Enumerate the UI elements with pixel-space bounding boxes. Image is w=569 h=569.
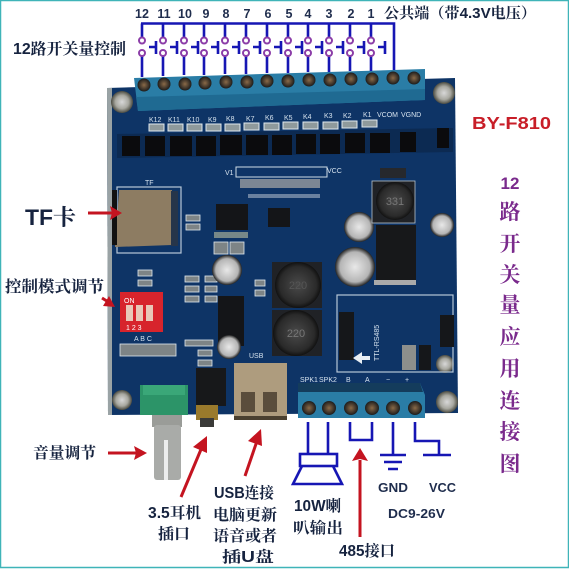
channel silkscreen labels: K7 (246, 116, 255, 123)
vertical title: 12 (501, 174, 519, 193)
channel numbers: 5 (286, 7, 293, 21)
channel silkscreen labels: K6 (265, 115, 274, 122)
earphone label (148, 503, 201, 543)
TF label: TF卡 (25, 205, 76, 230)
top terminal block (134, 69, 425, 111)
485 label: 485接口 (339, 541, 395, 560)
earphone label: 3.5耳机 (148, 503, 201, 522)
speaker label: 10W喇 (294, 497, 341, 515)
TTL-RS485 module outline: TTL-RS485 (374, 325, 381, 361)
channel silkscreen labels: K5 (284, 115, 293, 122)
electrolytic capacitors (212, 212, 454, 359)
pin header V1 VCC: V1 (225, 170, 234, 177)
power inductors: 331 (386, 196, 404, 208)
channel numbers: 6 (265, 7, 272, 21)
vertical title: 应 (500, 325, 520, 349)
terminal screws (138, 72, 420, 92)
channel silkscreen labels: K4 (303, 114, 312, 121)
speaker label (293, 497, 343, 537)
headphone jack (196, 368, 226, 427)
DIP switch (120, 292, 163, 343)
channel numbers: 12 (135, 7, 149, 21)
small passive components (120, 215, 265, 366)
volume label: 音量调节 (33, 443, 96, 462)
USB label: 电脑更新 (213, 506, 278, 524)
terminal screws (302, 401, 422, 415)
wiring: VCC (415, 422, 451, 455)
voltage label: DC9-26V (388, 507, 446, 521)
vertical title: 路 (500, 200, 520, 224)
common terminal label: 公共端（带4.3V电压） (384, 4, 536, 22)
DIP switch: ON (124, 298, 134, 305)
wiring: speaker symbol (293, 422, 342, 484)
TF arrow (88, 206, 122, 220)
pin header V1 VCC: VCC (327, 168, 342, 175)
bottom terminal labels: SPK1 (300, 377, 318, 384)
vertical title: 开 (500, 232, 520, 256)
channel numbers: 4 (305, 7, 312, 21)
earphone arrow (181, 436, 207, 497)
vertical title: 接 (500, 420, 522, 444)
circuit board (107, 78, 458, 427)
potentiometer (140, 385, 188, 480)
wiring: ground symbol (380, 422, 406, 469)
mode label: 控制模式调节 (5, 277, 104, 296)
switch control label: 12路开关量控制 (13, 39, 126, 58)
USB label: USB连接 (214, 483, 274, 502)
TF card slot (112, 180, 181, 253)
DIP switch: 1 2 3 (126, 325, 142, 332)
earphone label: 插口 (158, 524, 190, 543)
channel silkscreen labels: K8 (226, 116, 235, 123)
power inductors: 220 (289, 280, 307, 292)
485 arrow (352, 448, 368, 537)
vertical title: 量 (500, 293, 520, 317)
wiring: common bus and 12 switches (139, 24, 394, 77)
wiring: 485 terminal (350, 422, 372, 440)
bottom terminal labels: SPK2 (319, 377, 337, 384)
bottom terminal block (298, 383, 425, 418)
channel silkscreen labels: K2 (343, 113, 352, 120)
bottom terminal labels (300, 377, 409, 384)
vertical title: 关 (500, 263, 520, 287)
VCC label: VCC (429, 481, 456, 495)
channel silkscreen labels (149, 112, 421, 124)
vertical title: 图 (500, 452, 520, 476)
channel numbers: 1 (368, 7, 375, 21)
bottom terminal labels: B (346, 377, 351, 384)
TTL-RS485 module outline (337, 295, 454, 372)
channel numbers: 2 (348, 7, 355, 21)
channel numbers (135, 7, 375, 21)
USB label (213, 483, 278, 566)
channel numbers: 9 (203, 7, 210, 21)
mounting holes (111, 82, 458, 413)
bottom terminal labels: + (405, 377, 409, 384)
channel silkscreen labels: K11 (168, 117, 180, 124)
channel numbers: 8 (223, 7, 230, 21)
channel silkscreen labels: K12 (149, 117, 162, 124)
channel silkscreen labels: K9 (208, 117, 217, 124)
speaker label: 叭输出 (293, 518, 343, 537)
USB arrow (245, 429, 262, 476)
channel numbers: 11 (157, 7, 171, 21)
channel silkscreen labels: VCOM (377, 112, 398, 119)
vertical title (500, 174, 522, 476)
relay driver row (117, 128, 453, 158)
mode arrow (102, 296, 115, 307)
vertical title: 用 (500, 357, 520, 381)
channel silkscreen labels: K3 (324, 113, 333, 120)
USB socket: USB (249, 353, 264, 360)
bottom terminal labels: A (365, 377, 370, 384)
power inductors (272, 181, 415, 356)
channel numbers: 10 (178, 7, 192, 21)
USB label: 语音或者 (213, 526, 277, 545)
channel silkscreen labels: VGND (401, 112, 421, 119)
channel indicator LEDs (149, 120, 377, 131)
vertical title: 连 (500, 389, 520, 413)
model number: BY-F810 (472, 113, 551, 133)
GND label: GND (378, 481, 408, 495)
USB label: 插U盘 (222, 547, 275, 566)
bottom terminal labels: − (386, 377, 390, 384)
channel silkscreen labels: K1 (363, 112, 372, 119)
channel silkscreen labels: K10 (187, 117, 200, 124)
channel numbers: 3 (326, 7, 333, 21)
TF card slot: TF (145, 180, 154, 187)
switch contacts (139, 38, 374, 56)
pin header V1 VCC (225, 167, 342, 198)
regulator (374, 168, 416, 285)
power inductors: 220 (287, 328, 305, 340)
channel numbers: 7 (244, 7, 251, 21)
DIP switch: A B C (134, 336, 152, 343)
switch levers (149, 41, 385, 54)
USB socket (234, 353, 287, 420)
volume arrow (108, 446, 147, 460)
main ICs (214, 204, 290, 346)
